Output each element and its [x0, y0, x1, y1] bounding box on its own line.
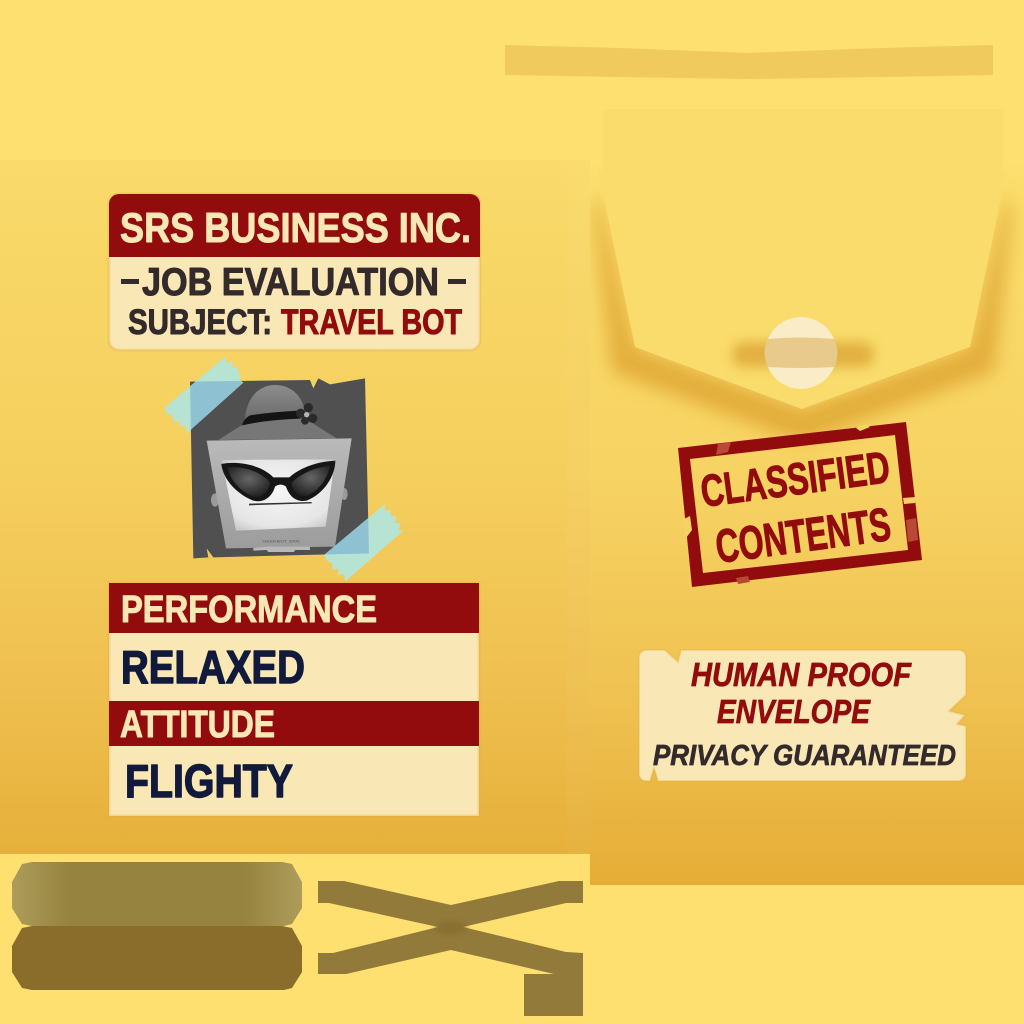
right dash [448, 279, 466, 284]
note heading line one: HUMAN PROOF [691, 656, 912, 693]
mouth [249, 502, 312, 505]
company name: SRS BUSINESS INC. [120, 204, 471, 251]
torn note [639, 650, 966, 781]
hat [218, 385, 337, 440]
stamp line two: CONTENTS [712, 497, 894, 573]
stats table [109, 583, 479, 816]
attitude value: FLIGHTY [125, 755, 293, 807]
document title: JOB EVALUATION [142, 261, 439, 304]
bot side ears [211, 488, 348, 507]
attitude label: ATTITUDE [120, 704, 275, 746]
monitor stand [253, 547, 310, 552]
stamp border [678, 422, 922, 587]
top strip [505, 45, 993, 79]
monitor body [207, 438, 352, 548]
monitor screen [222, 459, 335, 531]
button closure [732, 317, 874, 389]
left dash [121, 279, 139, 284]
tape top left [165, 356, 243, 433]
performance value: RELAXED [121, 641, 305, 693]
attitude header [109, 701, 479, 746]
crossed string shadow [318, 881, 583, 1016]
note heading line two: ENVELOPE [717, 693, 871, 730]
strap bottom shadow [12, 926, 302, 990]
envelope flap [598, 109, 1007, 409]
sunglasses [221, 461, 335, 501]
performance label: PERFORMANCE [121, 589, 377, 631]
note tagline: PRIVACY GUARANTEED [653, 740, 956, 772]
stamp line one: CLASSIFIED [698, 441, 893, 517]
panel: envelope back left [0, 160, 590, 854]
subject label: SUBJECT: [128, 303, 272, 342]
header card [109, 194, 480, 350]
taped photo of travel bot [165, 356, 403, 582]
strap top shadow [12, 862, 302, 926]
tape bottom right [324, 504, 403, 582]
photo backing [190, 378, 369, 558]
performance header [109, 583, 479, 633]
panel: envelope front right [590, 165, 1024, 885]
monitor label: GEEKBOT 3000 [262, 539, 301, 544]
subject value: TRAVEL BOT [281, 303, 462, 342]
classified stamp [678, 422, 922, 587]
stamp wear [682, 424, 918, 584]
